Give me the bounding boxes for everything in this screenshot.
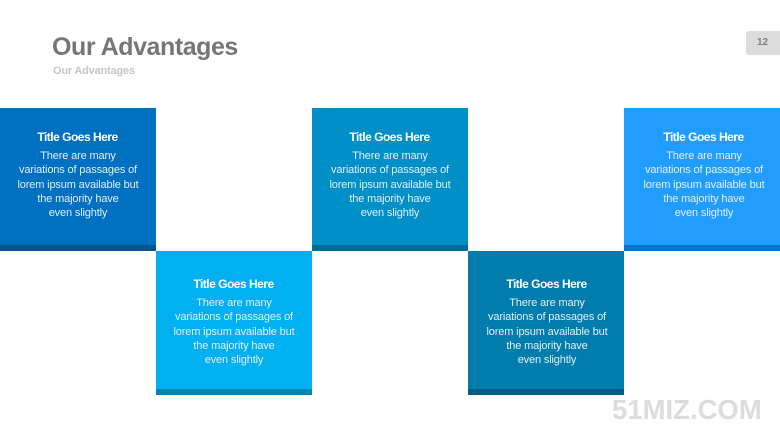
card 3 text: lorem ipsum available but bbox=[330, 179, 450, 191]
panel: card 4 bbox=[468, 251, 624, 395]
card 3 text: the majority have bbox=[349, 193, 431, 205]
card 3 title: Title Goes Here bbox=[349, 130, 430, 144]
card 2 text: even slightly bbox=[205, 354, 263, 366]
card 5 text: even slightly bbox=[675, 207, 733, 219]
card 3 text: even slightly bbox=[361, 207, 419, 219]
card 2 bottom bar bbox=[156, 389, 312, 395]
card 1 text bbox=[18, 150, 139, 219]
card 2 text: There are many bbox=[196, 297, 272, 309]
card 3 text bbox=[330, 150, 451, 219]
card 2 text: lorem ipsum available but bbox=[174, 326, 294, 338]
card 5 text: lorem ipsum available but bbox=[644, 179, 764, 191]
panel: card 1 bbox=[0, 108, 156, 251]
card 1 bottom bar bbox=[0, 245, 156, 251]
page number badge: 12 bbox=[757, 37, 768, 48]
card 4 text bbox=[486, 297, 608, 366]
card 5 text bbox=[644, 150, 765, 219]
card 5 text: the majority have bbox=[663, 193, 745, 205]
card 1 text: variations of passages of bbox=[19, 164, 137, 176]
title: Our Advantages bbox=[52, 33, 238, 61]
card 4 title: Title Goes Here bbox=[506, 277, 587, 291]
panel: card 3 bbox=[312, 108, 468, 251]
card 1 text: There are many bbox=[40, 150, 116, 162]
page number badge bbox=[746, 31, 780, 55]
panel: card 2 bbox=[156, 251, 312, 395]
panel: card 5 bbox=[624, 108, 780, 251]
card 2 text: the majority have bbox=[193, 340, 275, 352]
card 1 text: even slightly bbox=[49, 207, 107, 219]
card 5 text: There are many bbox=[666, 150, 742, 162]
card 4 text: lorem ipsum available but bbox=[486, 326, 607, 338]
card 4 text: There are many bbox=[509, 297, 585, 309]
card 3 bottom bar bbox=[312, 245, 468, 251]
card 5 title: Title Goes Here bbox=[663, 130, 744, 144]
card 1 title: Title Goes Here bbox=[37, 130, 118, 144]
card 3 text: variations of passages of bbox=[331, 164, 449, 176]
card 4 bottom bar bbox=[468, 389, 624, 395]
card 1 text: the majority have bbox=[37, 193, 119, 205]
card 3 text: There are many bbox=[352, 150, 428, 162]
card 1 text: lorem ipsum available but bbox=[18, 179, 138, 191]
card 2 text bbox=[174, 297, 295, 366]
card 2 text: variations of passages of bbox=[175, 311, 293, 323]
card 4 text: even slightly bbox=[518, 354, 576, 366]
card 4 text: variations of passages of bbox=[488, 311, 606, 323]
card 5 text: variations of passages of bbox=[645, 164, 763, 176]
card 2 title: Title Goes Here bbox=[193, 277, 274, 291]
card 5 bottom bar bbox=[624, 245, 780, 251]
watermark: 51MIZ.COM bbox=[612, 394, 762, 425]
card 4 text: the majority have bbox=[506, 340, 588, 352]
subtitle: Our Advantages bbox=[53, 65, 135, 77]
